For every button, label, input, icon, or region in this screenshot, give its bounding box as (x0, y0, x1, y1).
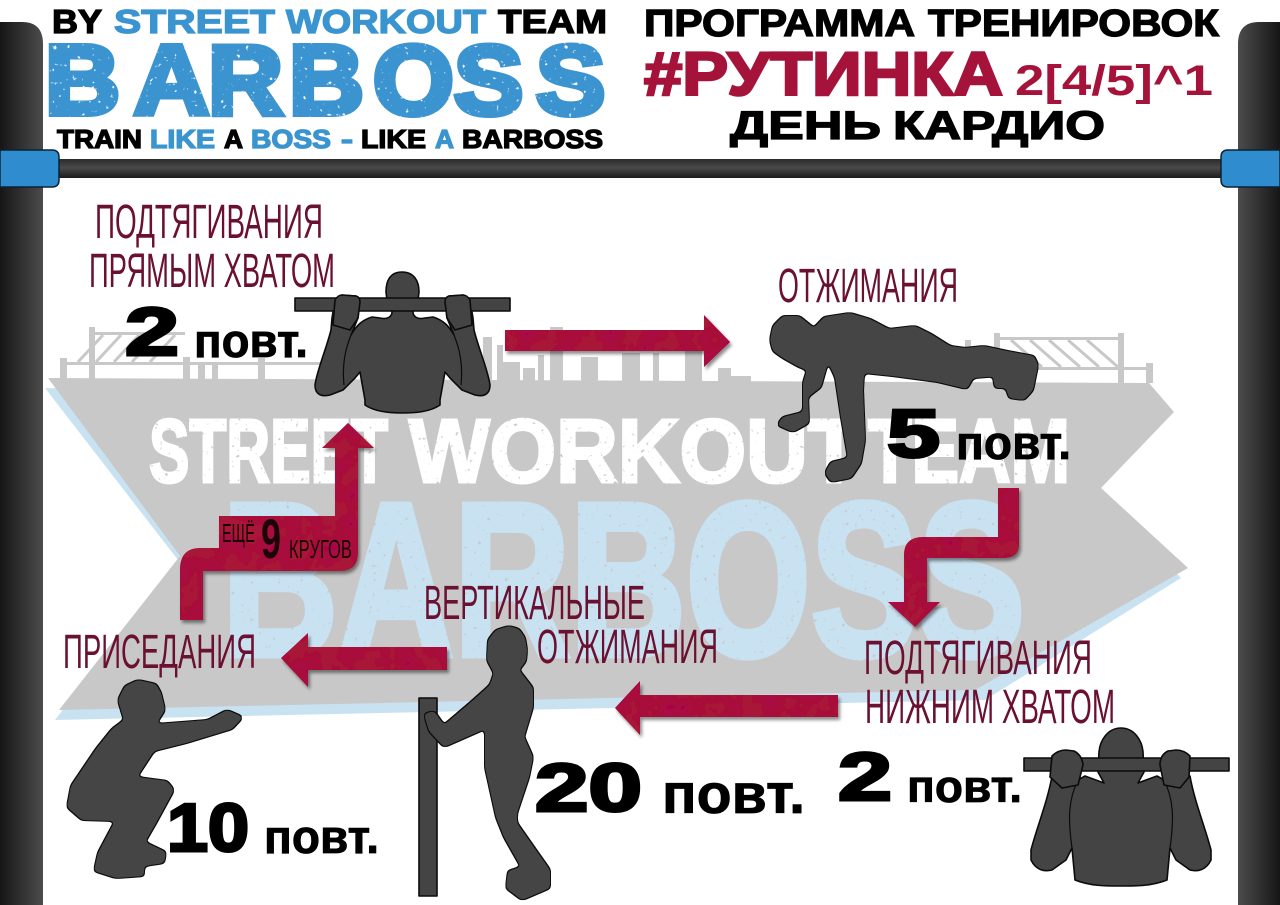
right post (1238, 22, 1280, 905)
loop caption: ЕЩЁ (222, 518, 255, 548)
horizontal bar (43, 159, 1238, 178)
loop arrow shape (180, 423, 374, 620)
arrow: step 1 to step 2 (505, 315, 730, 367)
step 2: push-ups (770, 260, 1071, 482)
count: 2 (125, 294, 179, 370)
right blue clamp (1221, 150, 1280, 187)
arrow: step 2 to step 3 (888, 488, 1019, 627)
tagline: by street workout team: WORKOUT (286, 3, 486, 40)
tagline: by street workout team (52, 3, 607, 40)
slogan: train like a boss: LIKE (150, 124, 215, 154)
banner blue shadow (45, 388, 1181, 720)
label: ПРЯМЫМ ХВАТОМ (89, 245, 335, 298)
label: ОТЖИМАНИЯ (537, 621, 718, 674)
banner grey body (48, 378, 1188, 710)
count (838, 739, 1022, 815)
left post (0, 22, 43, 905)
label: ВЕРТИКАЛЬНЫЕ (424, 577, 645, 630)
count (167, 790, 379, 866)
arrow: step 3 to step 4 (615, 681, 838, 735)
count: 20 (535, 750, 642, 826)
slogan: train like a boss: BARBOSS (462, 124, 603, 154)
step 5: squats (63, 626, 379, 878)
count (887, 396, 1071, 472)
count: 5 (887, 396, 940, 472)
heading: cardio day: КАРДИО (893, 104, 1105, 148)
count: повт. (956, 416, 1071, 469)
background banner: street workout team emblem (45, 327, 1188, 720)
slogan: train like a boss: A (435, 124, 454, 154)
count: повт. (907, 761, 1022, 812)
tagline: by street workout team: BY (52, 3, 102, 40)
count (535, 750, 805, 826)
loop caption: 9 (261, 507, 281, 570)
slogan: train like a boss: A (224, 124, 243, 154)
banner word: STREET: STREET (149, 402, 388, 502)
slogan: train like a boss: - (341, 124, 353, 154)
logo block (45, 3, 607, 154)
step 1: overhand pull-ups (89, 196, 510, 413)
label: ПОДТЯГИВАНИЯ (95, 196, 323, 249)
icon: pull-up figure, back view (1024, 728, 1229, 886)
routine formula: 2[4/5]^1 (1015, 57, 1213, 105)
banner word: WORKOUT: WORKOUT (409, 402, 860, 502)
icon: squat figure (67, 680, 243, 878)
slogan: train like a boss: LIKE (361, 124, 426, 154)
label (424, 577, 718, 674)
label: ПОДТЯГИВАНИЯ (864, 632, 1092, 685)
banner word: BARBOSS: BARBOSS (222, 459, 1025, 702)
count: 2 (838, 739, 892, 815)
heading: cardio day: ДЕНЬ (730, 104, 881, 148)
banner skyline and fence (60, 327, 1153, 384)
icon: pull-up figure, back view (295, 272, 510, 413)
step 4: vertical push-ups (419, 577, 805, 900)
heading: training program: ТРЕНИРОВОК (928, 3, 1220, 45)
step 3: underhand pull-ups (838, 632, 1229, 886)
count: повт. (194, 314, 308, 367)
left blue clamp (0, 150, 59, 187)
banner word: TEAM: TEAM (868, 402, 1070, 502)
loop caption (222, 507, 352, 570)
heading: training program (644, 3, 1220, 45)
slogan: train like a boss: TRAIN (57, 124, 142, 154)
label (89, 196, 335, 298)
label: ОТЖИМАНИЯ (778, 260, 958, 313)
count (125, 294, 308, 370)
icon: standing figure (424, 626, 550, 900)
arrow: repeat loop with 9 more rounds (180, 423, 374, 620)
arrow: step 4 to step 5 (281, 633, 447, 687)
count: 10 (167, 790, 249, 866)
slogan: train like a boss: BOSS (251, 124, 331, 154)
loop caption: КРУГОВ (289, 534, 352, 564)
slogan: train like a boss (57, 124, 603, 154)
tagline: by street workout team: STREET (114, 3, 275, 40)
icon: wall post (419, 698, 437, 896)
icon: push-up figure (770, 313, 1038, 482)
logo word BARBOSS: BARBOSS (45, 27, 605, 135)
tagline: by street workout team: TEAM (498, 3, 607, 40)
count: повт. (662, 762, 805, 825)
heading: routine hashtag: #РУТИНКА (644, 40, 1003, 108)
heading: cardio day (730, 104, 1105, 148)
label (864, 632, 1115, 734)
heading: training program: ПРОГРАММА (644, 3, 915, 45)
count: повт. (264, 810, 379, 863)
program title block (644, 3, 1220, 148)
label: ПРИСЕДАНИЯ (63, 626, 256, 679)
